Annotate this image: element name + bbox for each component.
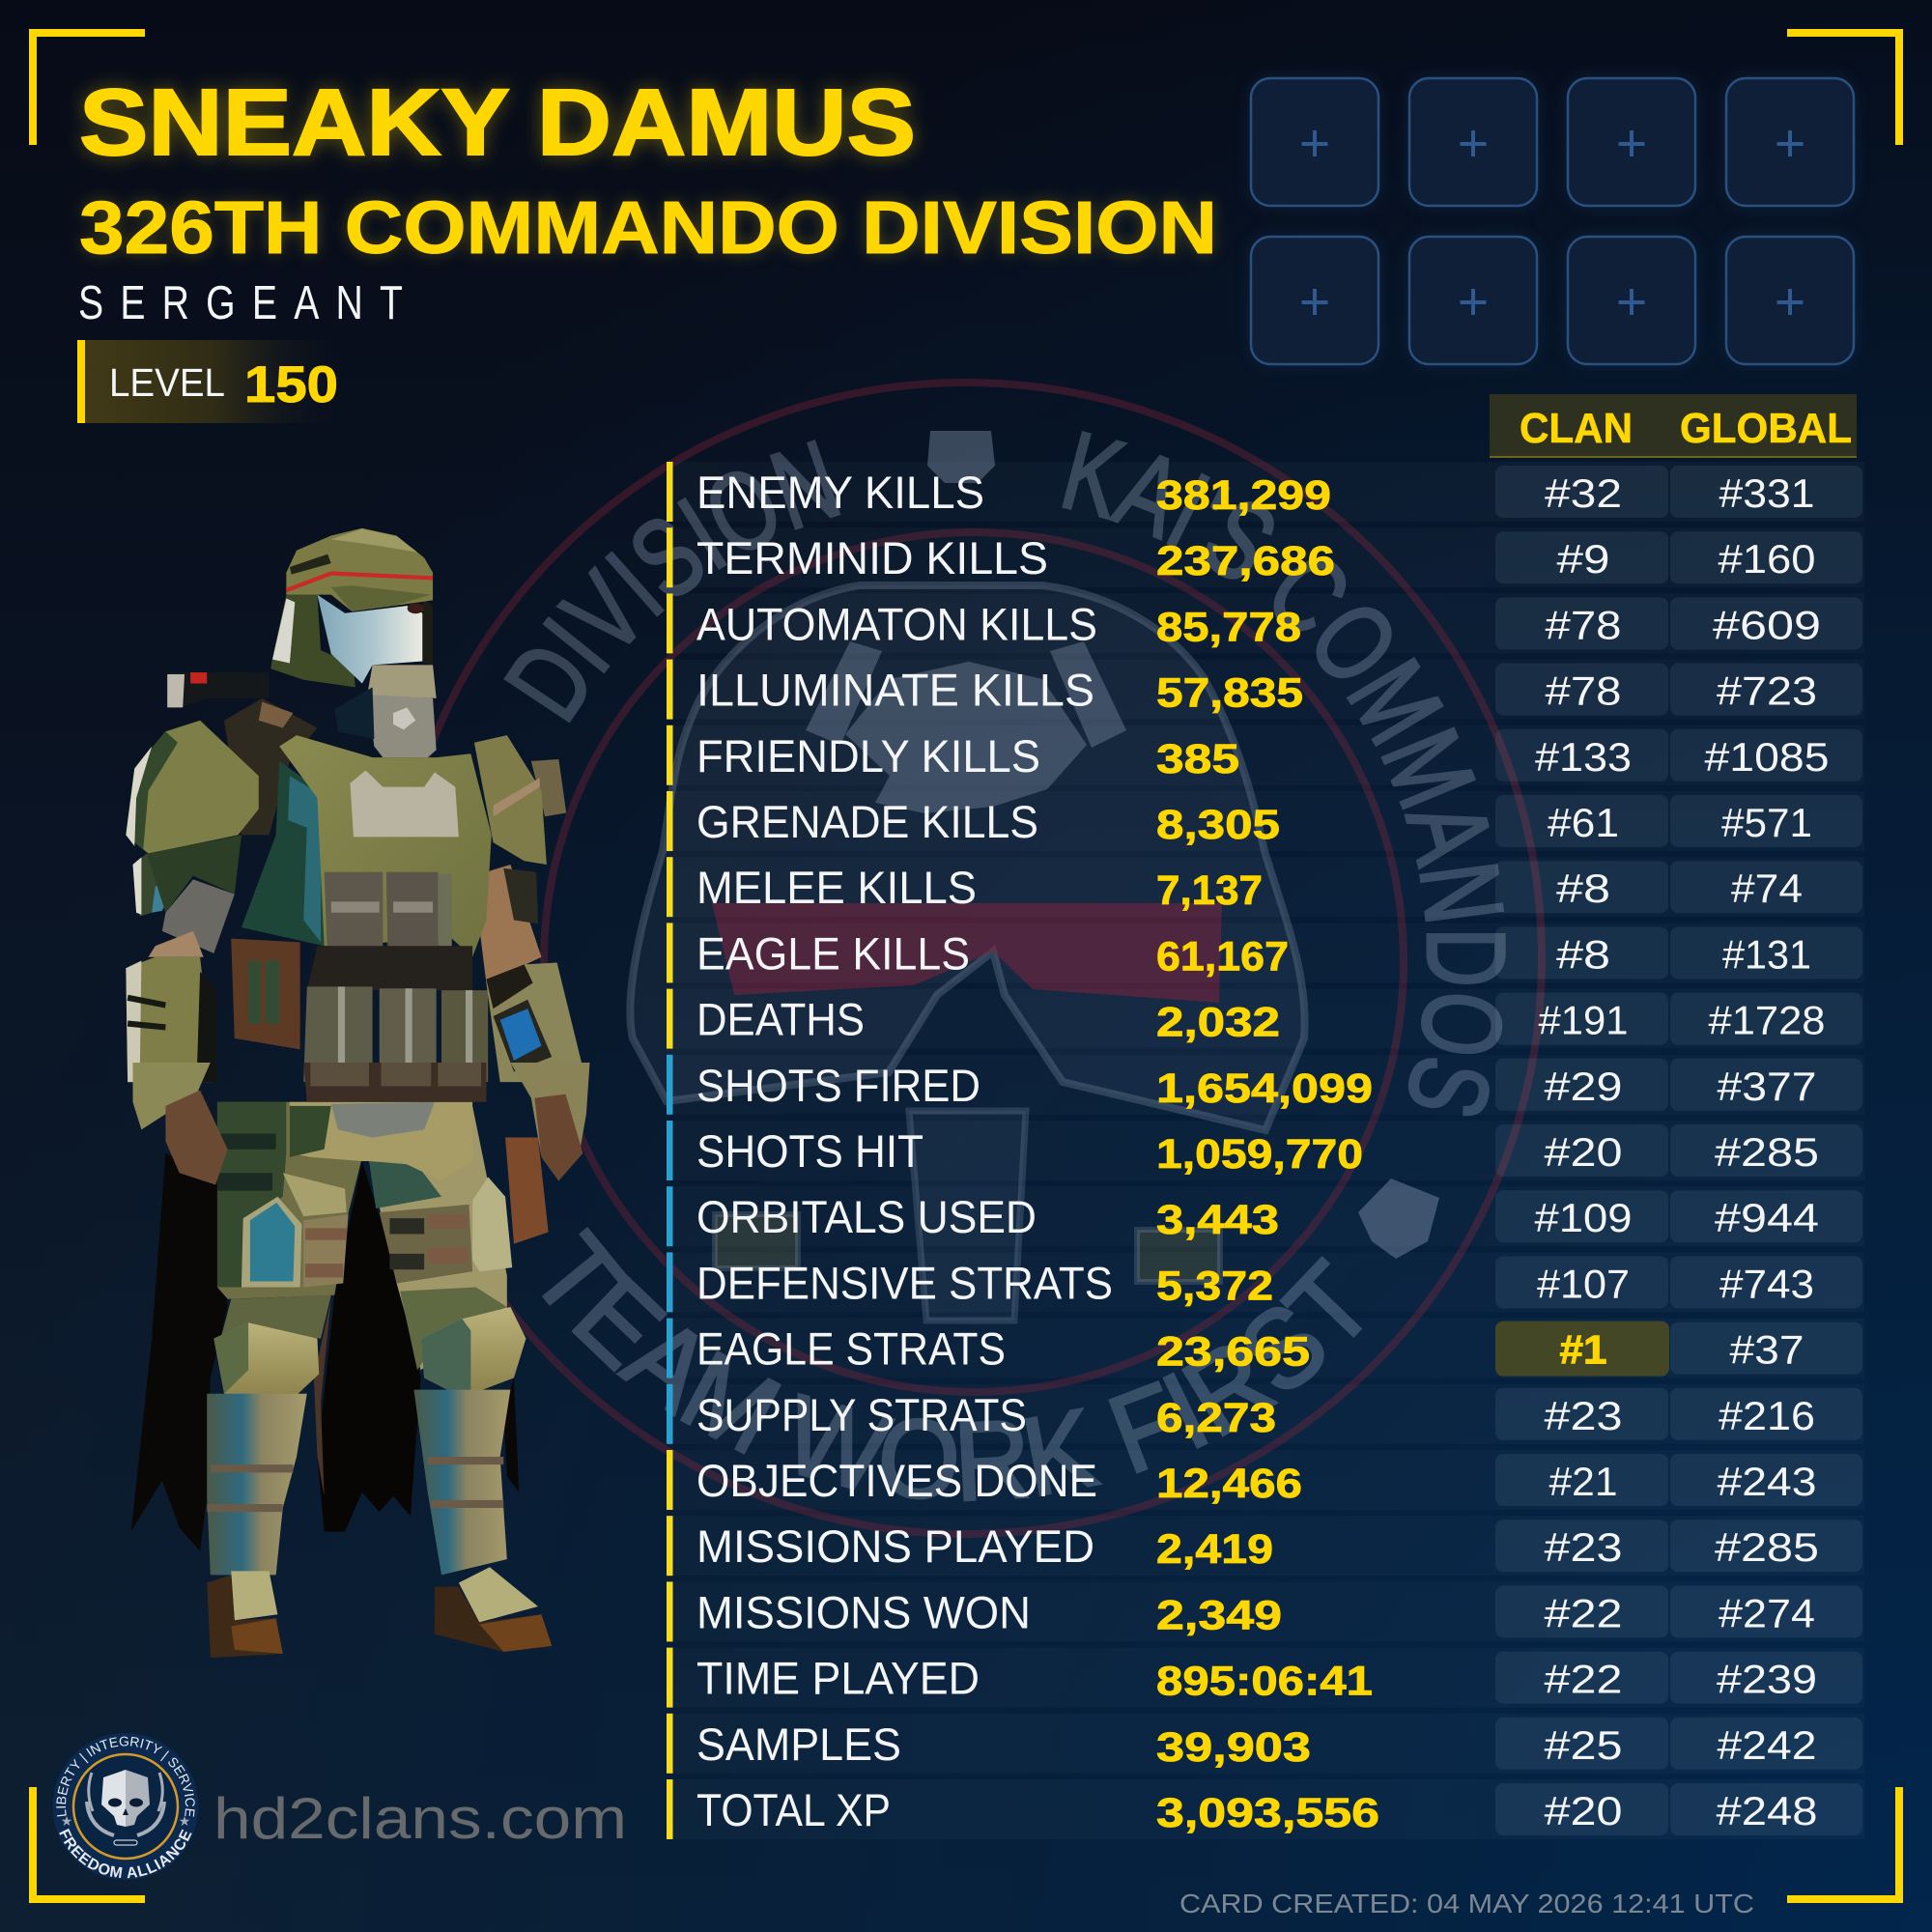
row: orbitals used [667, 1186, 1864, 1246]
row: deaths: #191 [1538, 998, 1629, 1043]
row: time played [667, 1648, 1864, 1708]
row: grenade kills: #61 [1548, 800, 1619, 845]
row: melee kills: #74 [1731, 866, 1803, 911]
row: samples: 39,903 [1156, 1724, 1311, 1771]
row: defensive strats: 5,372 [1156, 1263, 1273, 1309]
row: friendly kills: #133 [1535, 734, 1632, 780]
left thigh [217, 1102, 362, 1299]
corner bracket: top left [33, 33, 145, 145]
row: supply strats: SUPPLY STRATS [696, 1389, 1027, 1440]
row: orbitals used: #944 [1715, 1195, 1819, 1240]
row: defensive strats: DEFENSIVE STRATS [696, 1257, 1113, 1308]
row: objectives done: #21 [1549, 1459, 1617, 1504]
torso [242, 761, 325, 946]
helmet red band [286, 573, 433, 590]
corner bracket: top right [1787, 33, 1899, 145]
watermark: Kai's Commandos division emblem: KAI'S COMMANDOS [1062, 431, 1506, 1117]
row: grenade kills: GRENADE KILLS [696, 796, 1038, 847]
row: grenade kills: 8,305 [1156, 802, 1280, 848]
row: time played: #22 [1544, 1657, 1623, 1702]
helmet dome [286, 528, 433, 611]
shins [207, 1394, 307, 1575]
watermark: Kai's Commandos division emblem: DIVISION [504, 440, 840, 723]
row: friendly kills [667, 725, 1864, 785]
row: shots fired: #377 [1718, 1064, 1816, 1109]
row: shots fired: #29 [1544, 1064, 1623, 1109]
waist [307, 946, 472, 990]
row: eagle strats, clan rank highlighted: EAGLE STRATS [696, 1323, 1006, 1375]
row: objectives done [667, 1450, 1864, 1510]
soldier illustration [126, 528, 590, 1658]
row: objectives done: 12,466 [1156, 1461, 1302, 1507]
row: missions won: #274 [1719, 1590, 1815, 1635]
column heading: clan: CLAN [1520, 405, 1633, 452]
row: eagle kills: 61,167 [1156, 933, 1289, 980]
row: terminid kills: 237,686 [1156, 538, 1335, 584]
badge stars: ★ [61, 1813, 72, 1829]
row: enemy kills: 381,299 [1156, 472, 1331, 519]
row: samples [667, 1714, 1864, 1774]
helmet rear shell [270, 595, 355, 687]
soldier upper body [126, 528, 586, 1082]
row: friendly kills: 385 [1156, 736, 1239, 782]
row: total xp: #20 [1544, 1788, 1623, 1833]
boots [231, 1571, 277, 1620]
text: rank: SERGEANT [78, 277, 419, 329]
row: terminid kills: #9 [1557, 536, 1609, 582]
row: defensive strats: #107 [1537, 1261, 1630, 1306]
row: illuminate kills: ILLUMINATE KILLS [696, 665, 1094, 716]
row: missions played: MISSIONS PLAYED [696, 1520, 1094, 1572]
gray collar plate [367, 693, 437, 757]
helmet face [317, 595, 422, 684]
title: player name: SNEAKY DAMUS [79, 70, 916, 175]
column heading: global: GLOBAL [1680, 405, 1852, 452]
row: orbitals used: 3,443 [1156, 1197, 1279, 1243]
row: terminid kills: TERMINID KILLS [696, 532, 1048, 583]
row: shots fired: SHOTS FIRED [696, 1060, 980, 1111]
row: melee kills: #8 [1556, 866, 1610, 911]
badge bottom text: FREEDOM ALLIANCE [59, 1828, 192, 1878]
row: missions played: 2,419 [1156, 1526, 1273, 1573]
right thigh [369, 1106, 507, 1370]
row: automaton kills: AUTOMATON KILLS [696, 598, 1097, 649]
row: eagle kills: EAGLE KILLS [696, 927, 970, 979]
table header: clan and global [1490, 394, 1857, 458]
row: eagle kills [667, 923, 1864, 982]
row: shots hit: #285 [1715, 1129, 1819, 1175]
row: illuminate kills: #723 [1717, 668, 1817, 714]
row: melee kills: 7,137 [1156, 867, 1263, 914]
watermark: Kai's Commandos division emblem: TEAM WORK FIRST [542, 1227, 1362, 1501]
row: time played: 895:06:41 [1156, 1659, 1373, 1705]
row: automaton kills: 85,778 [1156, 604, 1301, 650]
row: terminid kills: #160 [1718, 536, 1816, 582]
row: automaton kills: #609 [1713, 602, 1821, 647]
row: eagle kills: #131 [1722, 931, 1811, 977]
right thigh plate [472, 1177, 512, 1271]
emblem: freedom alliance badge [52, 1733, 199, 1880]
row: eagle strats, clan rank highlighted [667, 1319, 1864, 1378]
left forearm [126, 957, 213, 1082]
level label: LEVEL [109, 360, 225, 405]
row: eagle strats, clan rank highlighted: 23,665 [1156, 1329, 1310, 1376]
row: illuminate kills: 57,835 [1156, 670, 1303, 717]
row: deaths: #1728 [1708, 998, 1826, 1043]
corner bracket: bottom left [33, 1787, 145, 1899]
soldier lower body [131, 1102, 552, 1658]
row: missions won: #22 [1544, 1590, 1623, 1635]
side pouch [505, 1138, 549, 1244]
row: illuminate kills: #78 [1546, 668, 1621, 714]
helmet visor [331, 585, 431, 611]
brown grenade pouch [231, 939, 300, 1049]
knees [213, 1322, 319, 1402]
stratagem slots grid [1251, 78, 1854, 364]
row: shots hit: #20 [1544, 1129, 1623, 1175]
upper ammo pouches [325, 872, 383, 961]
row: eagle strats, clan rank highlighted: #37 [1729, 1327, 1804, 1373]
belt pouches [303, 986, 373, 1082]
neck shadow [334, 687, 374, 739]
chest plate [350, 770, 459, 837]
row: grenade kills: #571 [1721, 800, 1812, 845]
row: deaths: DEATHS [696, 994, 865, 1045]
row: defensive strats [667, 1252, 1864, 1312]
row: missions played [667, 1516, 1864, 1576]
badge top text: LIBERTY | INTEGRITY | SERVICE [56, 1737, 195, 1817]
row: samples: #242 [1718, 1722, 1816, 1768]
row: deaths: 2,032 [1156, 1000, 1280, 1046]
row: time played: TIME PLAYED [696, 1653, 980, 1704]
corner bracket: bottom right [1787, 1787, 1899, 1899]
row: samples: SAMPLES [696, 1719, 901, 1770]
right forearm [486, 962, 586, 1082]
row: total xp: TOTAL XP [696, 1784, 891, 1835]
row: eagle kills: #8 [1556, 931, 1610, 977]
row: total xp: #248 [1716, 1788, 1818, 1833]
pelvis camouflage [290, 1102, 472, 1180]
level number: 150 [244, 356, 338, 413]
straps [224, 698, 317, 835]
row: defensive strats: #743 [1719, 1261, 1814, 1306]
row: shots hit: SHOTS HIT [696, 1125, 923, 1177]
row: supply strats: #23 [1544, 1393, 1623, 1438]
row: shots hit: 1,059,770 [1156, 1131, 1363, 1178]
row: friendly kills: #1085 [1704, 734, 1830, 780]
watermark: Kai's Commandos division emblem [386, 379, 1546, 1538]
badge skull [87, 1770, 164, 1845]
row: shots hit [667, 1121, 1864, 1180]
cape [131, 1153, 228, 1551]
row: enemy kills: #331 [1719, 470, 1814, 516]
row: missions won: 2,349 [1156, 1592, 1282, 1638]
row: missions played: #23 [1544, 1524, 1623, 1570]
row: total xp [667, 1779, 1864, 1839]
row: objectives done: OBJECTIVES DONE [696, 1455, 1097, 1506]
row: time played: #239 [1717, 1657, 1817, 1702]
row: missions played: #285 [1715, 1524, 1819, 1570]
row: supply strats: #216 [1719, 1393, 1815, 1438]
left shoulder armor [126, 721, 259, 854]
row: illuminate kills [667, 660, 1864, 720]
level badge [77, 340, 348, 423]
row: supply strats: 6,273 [1156, 1395, 1276, 1441]
row: grenade kills [667, 791, 1864, 851]
row: supply strats [667, 1384, 1864, 1444]
row: enemy kills: #32 [1545, 470, 1622, 516]
heading: division name: 326TH COMMANDO DIVISION [79, 186, 1217, 270]
row: deaths [667, 989, 1864, 1049]
row: terminid kills [667, 527, 1864, 587]
row: orbitals used: ORBITALS USED [696, 1191, 1037, 1242]
row: eagle strats, clan rank highlighted: #1 [1559, 1327, 1607, 1373]
row: missions won [667, 1581, 1864, 1641]
row: shots fired [667, 1055, 1864, 1115]
row: total xp: 3,093,556 [1156, 1790, 1379, 1836]
row: automaton kills: #78 [1546, 602, 1621, 647]
right arm skin [479, 865, 542, 983]
footer: card created timestamp: CARD CREATED: 04 MAY 2026 12:41 UTC [1179, 1889, 1754, 1918]
row: objectives done: #243 [1718, 1459, 1816, 1504]
soldier hands [132, 1063, 590, 1184]
row: friendly kills: FRIENDLY KILLS [696, 730, 1040, 781]
row: melee kills [667, 857, 1864, 917]
site name: hd2clans.com [213, 1786, 627, 1851]
row: melee kills: MELEE KILLS [696, 862, 977, 913]
right shoulder armor [531, 759, 566, 816]
row: samples: #25 [1544, 1722, 1623, 1768]
left thigh plate [242, 1197, 301, 1288]
row: automaton kills [667, 593, 1864, 653]
row: missions won: MISSIONS WON [696, 1586, 1031, 1637]
backpack antenna [167, 672, 269, 705]
row: enemy kills: ENEMY KILLS [696, 467, 984, 518]
row: shots fired: 1,654,099 [1156, 1065, 1373, 1112]
helmet eye [408, 603, 424, 613]
row: orbitals used: #109 [1534, 1195, 1633, 1240]
row: enemy kills [667, 462, 1864, 522]
badge stars: ★ [179, 1813, 190, 1829]
